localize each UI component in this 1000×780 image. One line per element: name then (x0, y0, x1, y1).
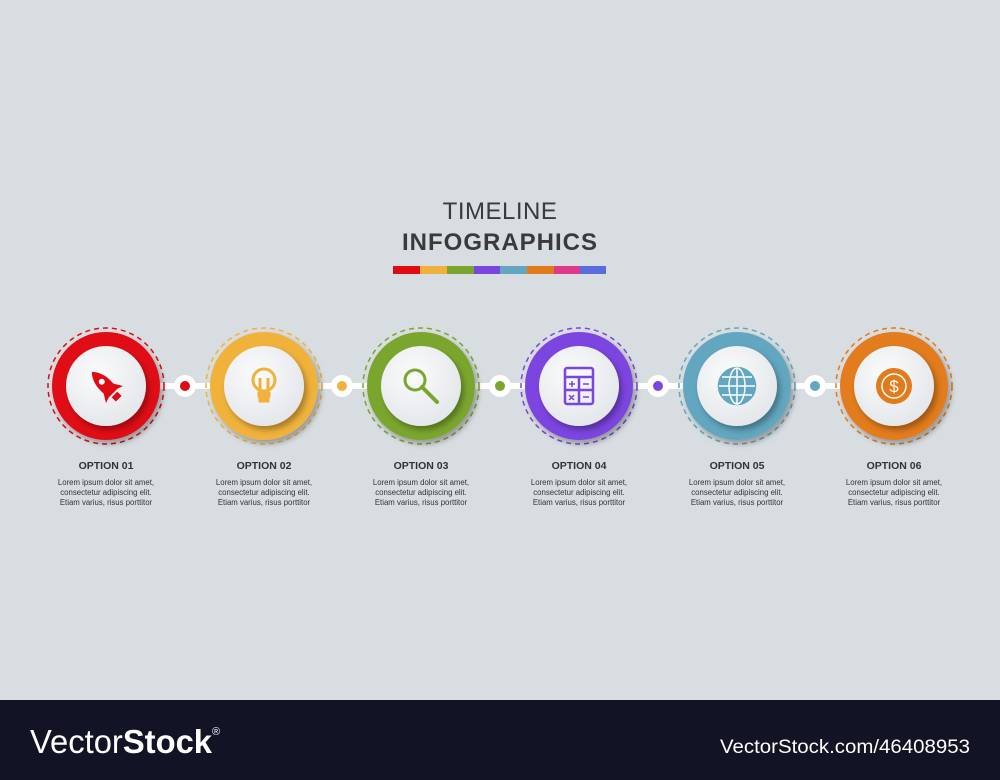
footer: VectorStock (30, 723, 213, 760)
step 2: Etiam varius, risus porttitor (218, 498, 311, 507)
label 5: OPTION 05 (710, 460, 765, 472)
step 1: consectetur adipiscing elit. (60, 488, 152, 497)
step 5: Etiam varius, risus porttitor (691, 498, 784, 507)
step 5 (679, 328, 795, 507)
step 4: consectetur adipiscing elit. (533, 488, 625, 497)
step 1 (48, 328, 164, 507)
icon: globe (719, 368, 755, 404)
icon: rocket (83, 363, 127, 407)
label 6: OPTION 06 (867, 460, 922, 472)
step 4 (521, 328, 637, 507)
step 6: Etiam varius, risus porttitor (848, 498, 941, 507)
connector line (106, 375, 894, 397)
step 2: consectetur adipiscing elit. (218, 488, 310, 497)
title: TIMELINE (443, 198, 557, 225)
step 1: Etiam varius, risus porttitor (60, 498, 153, 507)
icon: dollar coin (876, 368, 912, 404)
step 3: consectetur adipiscing elit. (375, 488, 467, 497)
icon: calculator (565, 368, 593, 404)
step 1: Lorem ipsum dolor sit amet, (58, 478, 154, 487)
step 5: consectetur adipiscing elit. (691, 488, 783, 497)
step 4: Lorem ipsum dolor sit amet, (531, 478, 627, 487)
step 6: Lorem ipsum dolor sit amet, (846, 478, 942, 487)
icon: magnifier (405, 370, 437, 402)
icon: dollar coin: $ (889, 377, 899, 396)
footer: VectorStock.com/46408953 (720, 737, 970, 758)
footer: ® (212, 726, 220, 738)
label 4: OPTION 04 (552, 460, 607, 472)
step 6 (836, 328, 952, 507)
title (402, 198, 598, 256)
step 4: Etiam varius, risus porttitor (533, 498, 626, 507)
title: INFOGRAPHICS (402, 229, 598, 256)
step 2: Lorem ipsum dolor sit amet, (216, 478, 312, 487)
color bar (393, 266, 606, 274)
footer (0, 700, 1000, 780)
label 3: OPTION 03 (394, 460, 449, 472)
icon: bulb (253, 369, 275, 401)
label 1: OPTION 01 (79, 460, 134, 472)
step 5: Lorem ipsum dolor sit amet, (689, 478, 785, 487)
step 6: consectetur adipiscing elit. (848, 488, 940, 497)
step 3: Etiam varius, risus porttitor (375, 498, 468, 507)
step 3: Lorem ipsum dolor sit amet, (373, 478, 469, 487)
step 2 (206, 328, 322, 507)
label 2: OPTION 02 (237, 460, 292, 472)
step 3 (363, 328, 479, 507)
